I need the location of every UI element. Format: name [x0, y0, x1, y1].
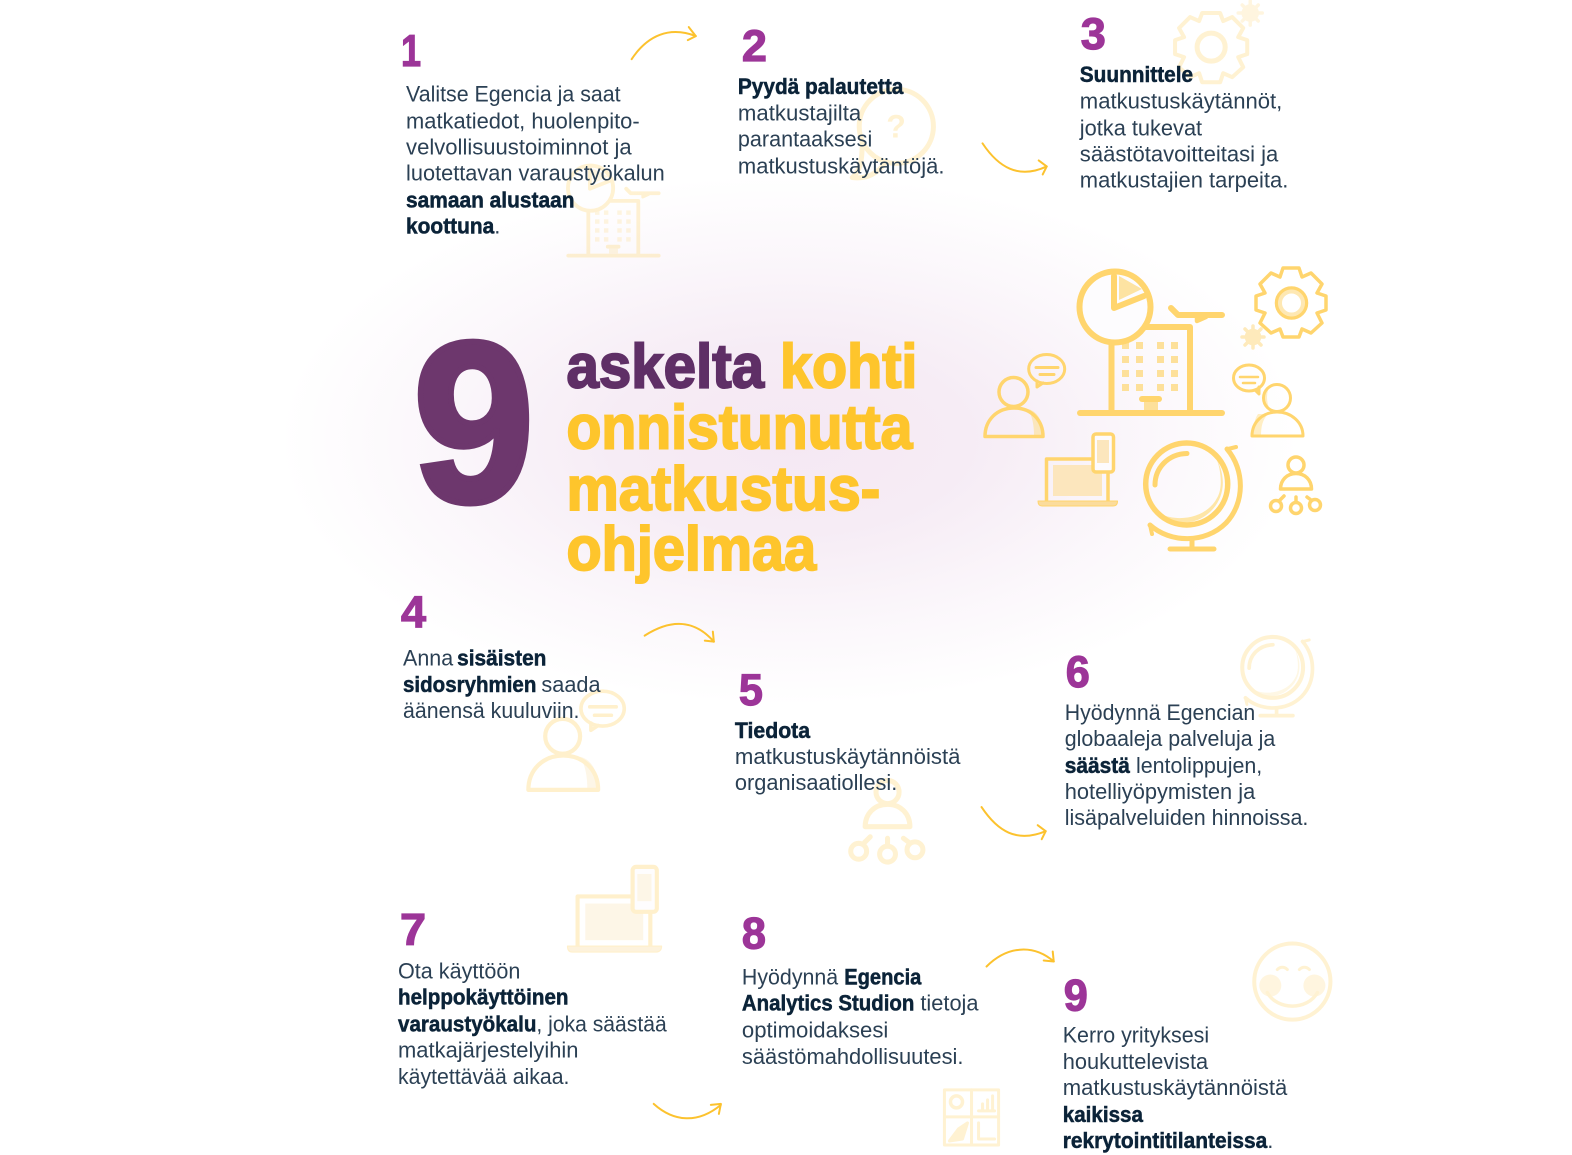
step 9 [1063, 943, 1330, 1153]
arrow 4 to 5 [645, 624, 714, 642]
step 5 text: organisaatiollesi. [735, 770, 897, 795]
arrow 2 to 3 [983, 143, 1047, 174]
step 9 text: matkustuskäytännöistä [1063, 1075, 1288, 1100]
step 8 text: Egencia [844, 965, 922, 990]
faded icon: person with network [851, 781, 923, 862]
faded icon: smiley [1254, 943, 1330, 1020]
step 9 text: . [1267, 1128, 1273, 1153]
step 7 text: matkajärjestelyihin [398, 1038, 579, 1063]
arrow 1 to 2 [632, 27, 696, 59]
number 8: 8 [742, 909, 766, 958]
step 6 text: lentolippujen, [1136, 753, 1262, 778]
page content [398, 1, 1330, 1153]
step 4 [401, 589, 624, 790]
faded icon: gear [1175, 13, 1247, 82]
headline line 1: kohti [780, 333, 917, 402]
arrow 7 to 8 [654, 1104, 721, 1118]
step 9 text: Kerro yrityksesi [1063, 1023, 1209, 1048]
step 3 text: säästötavoitteitasi ja [1080, 141, 1279, 166]
step 6 [1065, 637, 1312, 830]
step 3 text: Suunnittele [1080, 62, 1193, 87]
step 6 text: globaaleja palveluja ja [1065, 726, 1276, 751]
step 7 text [398, 959, 667, 1089]
step 7 text: käytettävää aikaa. [398, 1064, 569, 1089]
icon: gear [1256, 268, 1326, 337]
step 5 text: matkustuskäytännöistä [735, 744, 961, 769]
step 2 text [738, 74, 944, 178]
step 4 text: Anna [403, 646, 454, 671]
headline line 1 [566, 333, 917, 402]
step 5 text: Tiedota [735, 718, 811, 743]
step 1 [401, 27, 665, 256]
step 6 text: hotelliyöpymisten ja [1065, 779, 1256, 804]
faded icon: building [568, 166, 659, 256]
icon cluster: central illustration [985, 268, 1326, 549]
number 3: 3 [1081, 10, 1106, 59]
faded icon: laptop and phone [568, 867, 662, 952]
step 6 text: lisäpalveluiden hinnoissa. [1065, 805, 1308, 830]
step 2 text: matkustuskäytäntöjä. [738, 153, 944, 178]
step 2 text: matkustajilta [738, 100, 862, 125]
number 7: 7 [400, 905, 426, 954]
icon: building with clock and plane [1080, 272, 1222, 413]
step 2 [738, 22, 944, 178]
step 1 text: velvollisuustoiminnot ja [406, 134, 632, 159]
step 3 text: matkustajien tarpeita. [1080, 167, 1288, 192]
icon: globe [1146, 443, 1240, 549]
faded icon: sparkle [1238, 1, 1262, 25]
icon: person speaking right [1234, 365, 1303, 436]
faded icon: globe [1242, 637, 1312, 716]
step 8 text: Hyödynnä [742, 965, 839, 990]
background glow [270, 170, 1310, 710]
faded icon: question bubble [852, 89, 933, 178]
step 9 text: houkuttelevista [1063, 1049, 1209, 1074]
faded icon: question bubble: ? [886, 108, 906, 144]
step 5 [735, 666, 961, 862]
step 6 text [1065, 700, 1308, 830]
headline: 9 askelta kohti onnistunutta matkustusohjelmaa [413, 295, 917, 584]
step 3 text: jotka tukevat [1079, 115, 1202, 140]
step 7 text: varaustyökalu [398, 1012, 536, 1037]
step 6 text: Hyödynnä Egencian [1065, 700, 1255, 725]
faded icon: person with speech bubble [528, 691, 624, 790]
number 9: 9 [1064, 972, 1088, 1021]
step 6 text: säästä [1065, 753, 1131, 778]
headline line 1: askelta [566, 333, 764, 402]
step 1 text: koottuna [406, 214, 495, 239]
step 2 text: Pyydä palautetta [738, 74, 904, 99]
step 4 text: saada [541, 672, 601, 697]
step 9 text [1063, 1023, 1288, 1153]
step 1 text: Valitse Egencia ja saat [406, 81, 621, 106]
step 3 text: matkustuskäytännöt, [1080, 88, 1282, 113]
headline line 2: onnistunutta [566, 394, 913, 463]
step 8 text: tietoja [920, 991, 979, 1016]
step 4 text: sidosryhmien [403, 672, 536, 697]
step 7 text: Ota käyttöön [398, 959, 520, 984]
step 1 text: . [494, 214, 500, 239]
step 3 text [1079, 62, 1288, 192]
number 5: 5 [739, 666, 763, 715]
arrow 5 to 6 [982, 807, 1046, 839]
step 1 text: samaan alustaan [406, 188, 574, 213]
step 5 text [735, 718, 961, 795]
big numeral 9: 9 [413, 295, 534, 550]
step 3 [1079, 1, 1288, 192]
step 7 text: helppokäyttöinen [398, 985, 568, 1010]
step 1 text [406, 81, 665, 239]
step 8 text [742, 965, 979, 1069]
step 4 text: äänensä kuuluviin. [403, 698, 580, 723]
step 1 text: luotettavan varaustyökalun [406, 160, 665, 185]
icon: person speaking left [985, 354, 1065, 436]
step 4 text: sisäisten [457, 646, 546, 671]
number 2: 2 [742, 22, 767, 71]
step 7 text: , joka säästää [536, 1012, 667, 1037]
step 4 text [403, 646, 601, 723]
number 4: 4 [401, 589, 427, 638]
faded icon: analytics dashboard [944, 1090, 999, 1145]
headline line 3: matkustus- [566, 455, 880, 524]
step 9 text: rekrytointitilanteissa [1063, 1128, 1268, 1153]
number 1: 1 [401, 27, 421, 76]
step 7 [398, 867, 667, 1089]
icon: sparkle [1242, 326, 1264, 348]
step 9 text: kaikissa [1063, 1102, 1144, 1127]
number 6: 6 [1066, 648, 1090, 697]
icon: person with network [1270, 457, 1320, 514]
icon: laptop and phone [1038, 434, 1118, 506]
step 8 text: optimoidaksesi [742, 1018, 888, 1043]
step 1 text: matkatiedot, huolenpito- [406, 108, 640, 133]
step 8 text: Analytics Studion [742, 991, 914, 1016]
headline line 4: ohjelmaa [566, 515, 817, 584]
step 8 text: säästömahdollisuutesi. [742, 1044, 963, 1069]
step 2 text: parantaaksesi [738, 126, 872, 151]
arrow 8 to 9 [987, 950, 1054, 967]
step 8 [742, 909, 999, 1145]
